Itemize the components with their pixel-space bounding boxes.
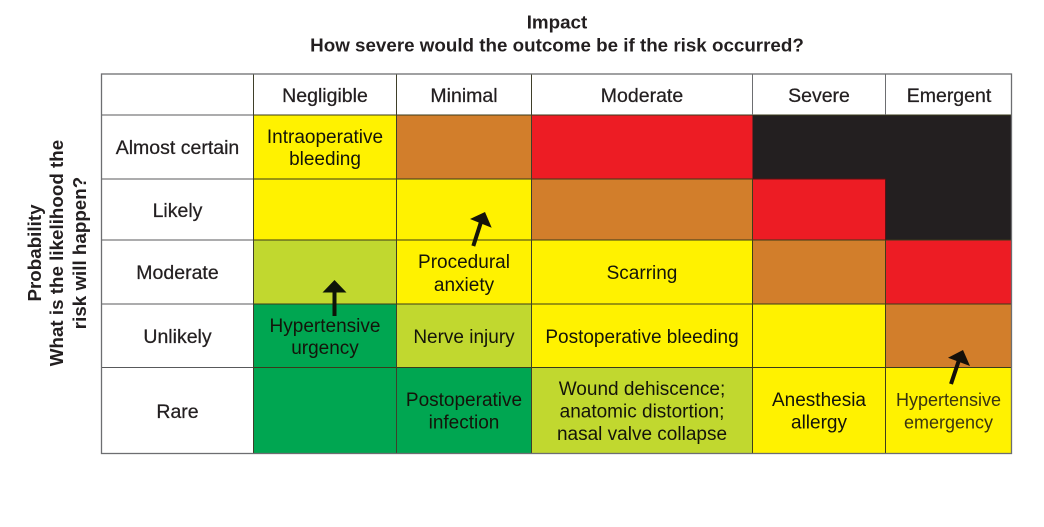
column headers: Severe (788, 85, 850, 107)
cell text: anesthesia allergy: Anesthesia (772, 390, 866, 411)
cell text: intraoperative bleeding (267, 127, 383, 170)
arrow: hypertensive emergency up (948, 350, 970, 384)
cell text: nerve injury: Nerve injury (413, 327, 515, 348)
cell text: postoperative infection (406, 390, 522, 434)
column headers: Minimal (430, 85, 498, 107)
title: probability axis (24, 140, 90, 366)
title: impact axis (310, 12, 804, 56)
cell text: procedural anxiety (418, 252, 510, 296)
cell text: intraoperative bleeding: bleeding (289, 149, 361, 170)
row headers: Unlikely (143, 326, 212, 348)
title: probability axis: What is the likelihood the (46, 140, 67, 366)
cell text: wound complications: Wound dehiscence; (559, 379, 725, 400)
header row background (102, 74, 1012, 115)
row headers: Likely (153, 200, 203, 222)
risk matrix table (102, 74, 1012, 454)
row: likely cells (254, 179, 1012, 240)
row: moderate cells (254, 240, 1012, 304)
cell text: hypertensive emergency: Hypertensive (896, 390, 1001, 410)
cell text: postoperative bleeding: Postoperative bleeding (545, 327, 739, 348)
cell text: hypertensive urgency (270, 316, 380, 359)
cell text: anesthesia allergy (772, 390, 866, 434)
cell text: hypertensive emergency: emergency (904, 412, 993, 432)
cell text: intraoperative bleeding: Intraoperative (267, 127, 383, 148)
cell text: postoperative infection: Postoperative (406, 390, 522, 411)
cell text: wound complications (557, 379, 727, 445)
title: impact axis: How severe would the outcome be if the risk occurred? (310, 34, 804, 56)
row: unlikely cells (254, 304, 1012, 368)
cell text: wound complications: anatomic distortion; (560, 402, 724, 422)
title: probability axis: risk will happen? (69, 177, 90, 329)
arrow: procedural anxiety up (470, 212, 492, 246)
cell text: anesthesia allergy: allergy (791, 412, 847, 434)
cell text: procedural anxiety: anxiety (434, 275, 495, 296)
row: rare cells (254, 368, 1012, 454)
cell text: postoperative infection: infection (429, 412, 499, 434)
cell text: hypertensive urgency: urgency (291, 338, 359, 359)
title: impact axis: Impact (527, 12, 588, 32)
cell text: procedural anxiety: Procedural (418, 252, 510, 273)
cell text: hypertensive emergency (896, 390, 1001, 432)
arrow: hypertensive urgency up (322, 280, 346, 316)
column headers: Negligible (282, 85, 368, 107)
column headers: Moderate (601, 85, 683, 107)
row headers: Moderate (136, 262, 219, 284)
column headers (282, 85, 992, 107)
cell text: hypertensive urgency: Hypertensive (270, 316, 380, 337)
row headers: Rare (156, 401, 199, 423)
row: almost certain cells (254, 115, 1012, 179)
cell text: wound complications: nasal valve collapse (557, 424, 727, 445)
row headers: Almost certain (116, 137, 239, 159)
title: probability axis: Probability (24, 204, 45, 302)
row headers (116, 137, 239, 423)
cell text: scarring: Scarring (607, 263, 677, 284)
column headers: Emergent (907, 85, 992, 107)
